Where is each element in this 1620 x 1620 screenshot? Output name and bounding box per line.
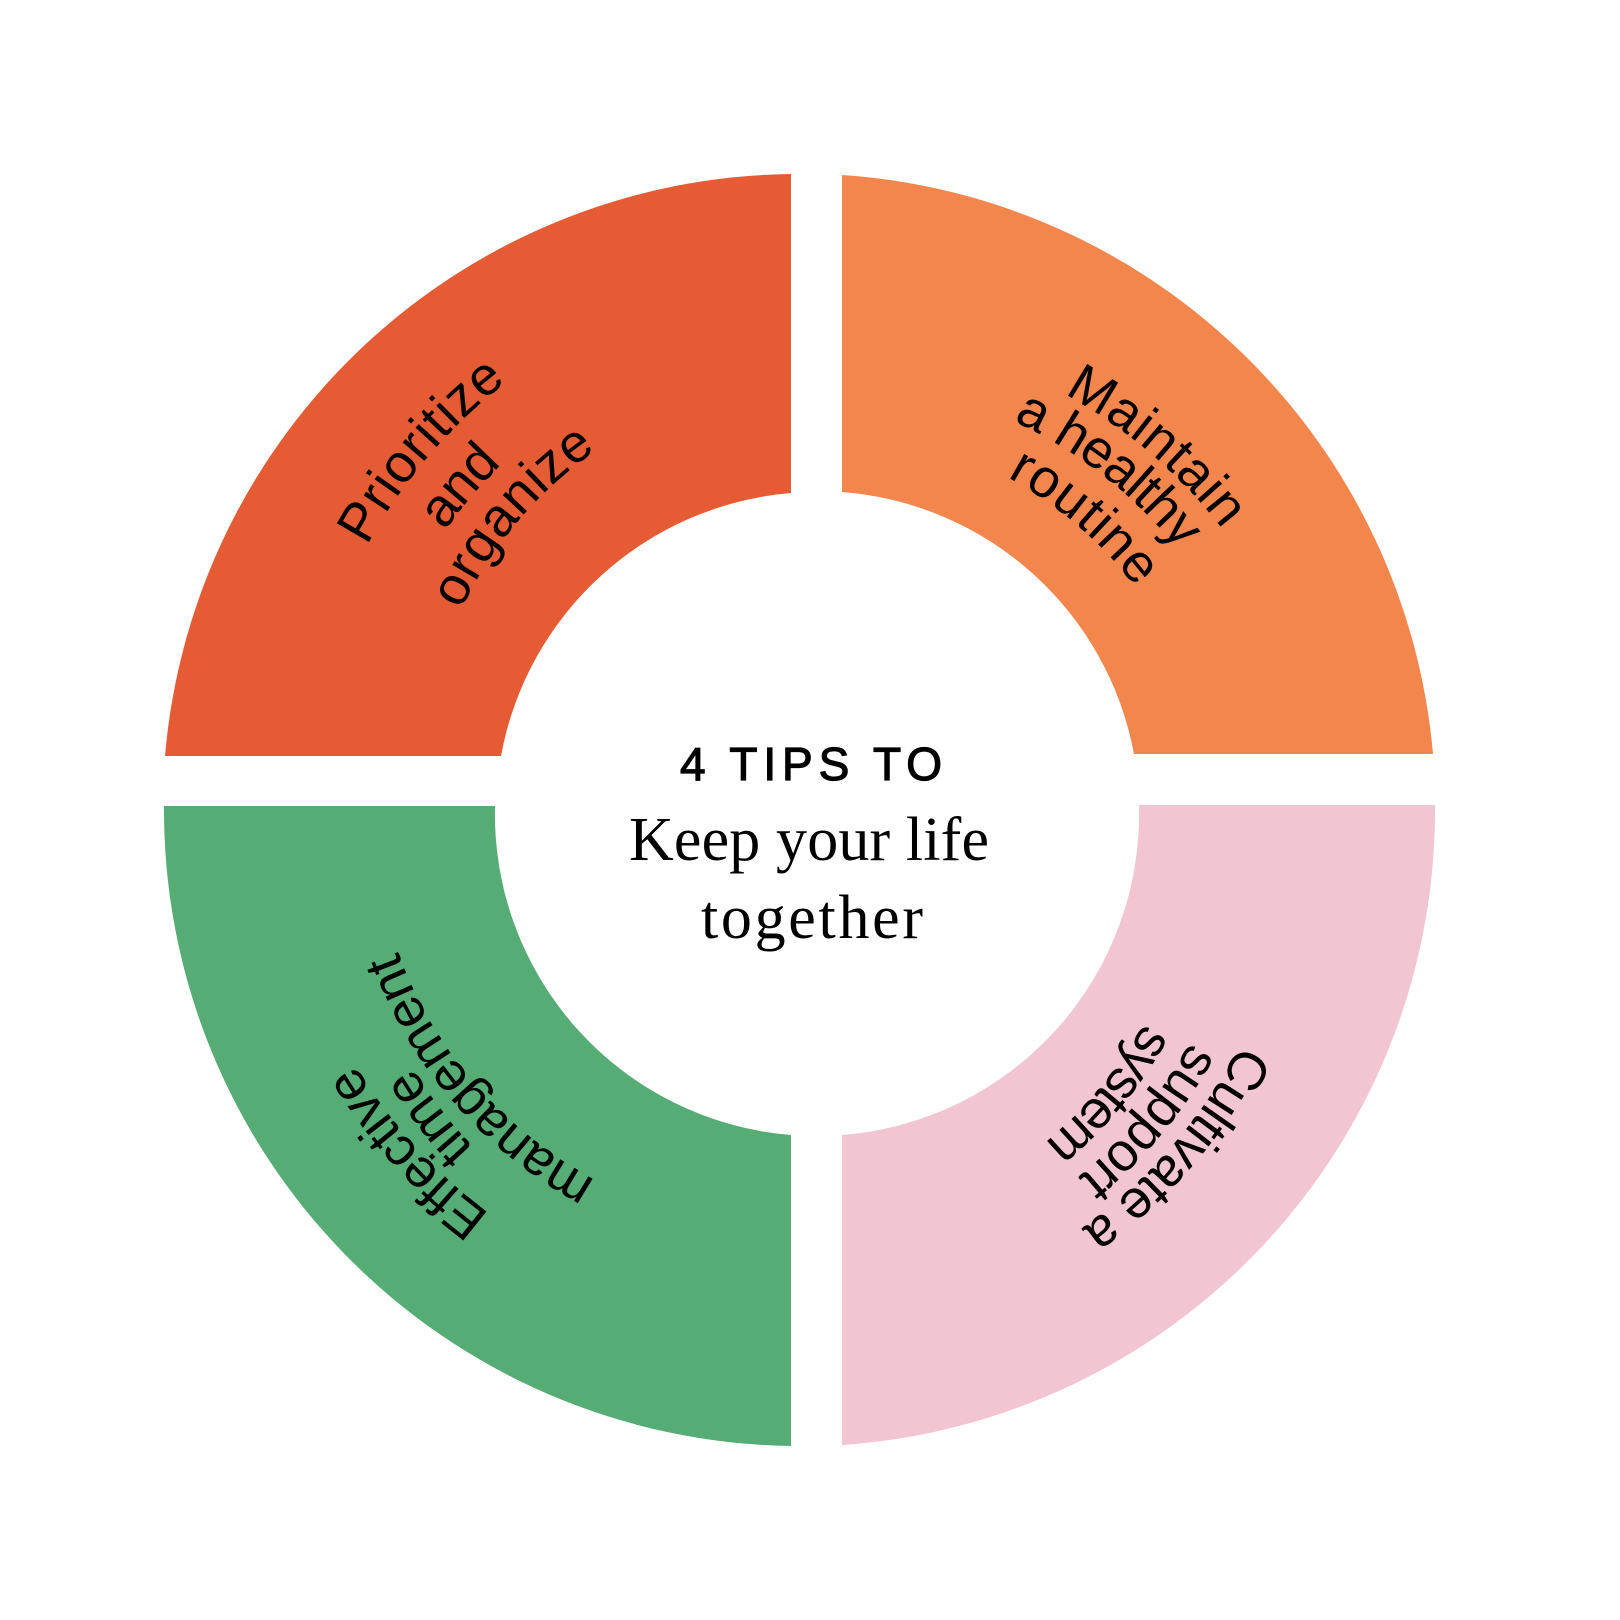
panel: maintain a healthy routine <box>842 175 1433 754</box>
label: prioritize and organize: Prioritize <box>337 366 501 542</box>
wedge: orange segment <box>842 175 1433 754</box>
panel: effective time management <box>164 806 791 1446</box>
panel: cultivate a support system <box>842 805 1435 1445</box>
heading: keep your life together: Keep your life <box>629 806 989 874</box>
label: maintain a healthy routine: routine <box>1010 454 1152 582</box>
wedge: green segment <box>164 806 791 1446</box>
label: effective time management: management <box>368 952 592 1204</box>
wedge: red segment <box>165 174 791 756</box>
center title block <box>629 738 989 952</box>
label: prioritize and organize: and <box>427 439 500 526</box>
wedge: pink segment <box>842 805 1435 1445</box>
label: prioritize and organize <box>337 366 590 604</box>
label: cultivate a support system: system <box>1047 1027 1165 1160</box>
label: effective time management: Effective <box>336 1070 486 1240</box>
label: prioritize and organize: organize <box>440 432 590 604</box>
heading: keep your life together <box>629 806 989 952</box>
label: cultivate a support system: Cultivate a <box>1081 1052 1266 1246</box>
label: maintain a healthy routine: Maintain <box>1068 364 1240 526</box>
label: cultivate a support system: support <box>1078 1046 1211 1200</box>
panel: prioritize and organize <box>165 174 791 756</box>
heading: keep your life together: together <box>701 884 923 952</box>
label: effective time management: time <box>394 1072 470 1168</box>
kicker: 4 tips to: 4 TIPS TO <box>680 738 942 790</box>
label: maintain a healthy routine: a healthy <box>1018 400 1200 544</box>
